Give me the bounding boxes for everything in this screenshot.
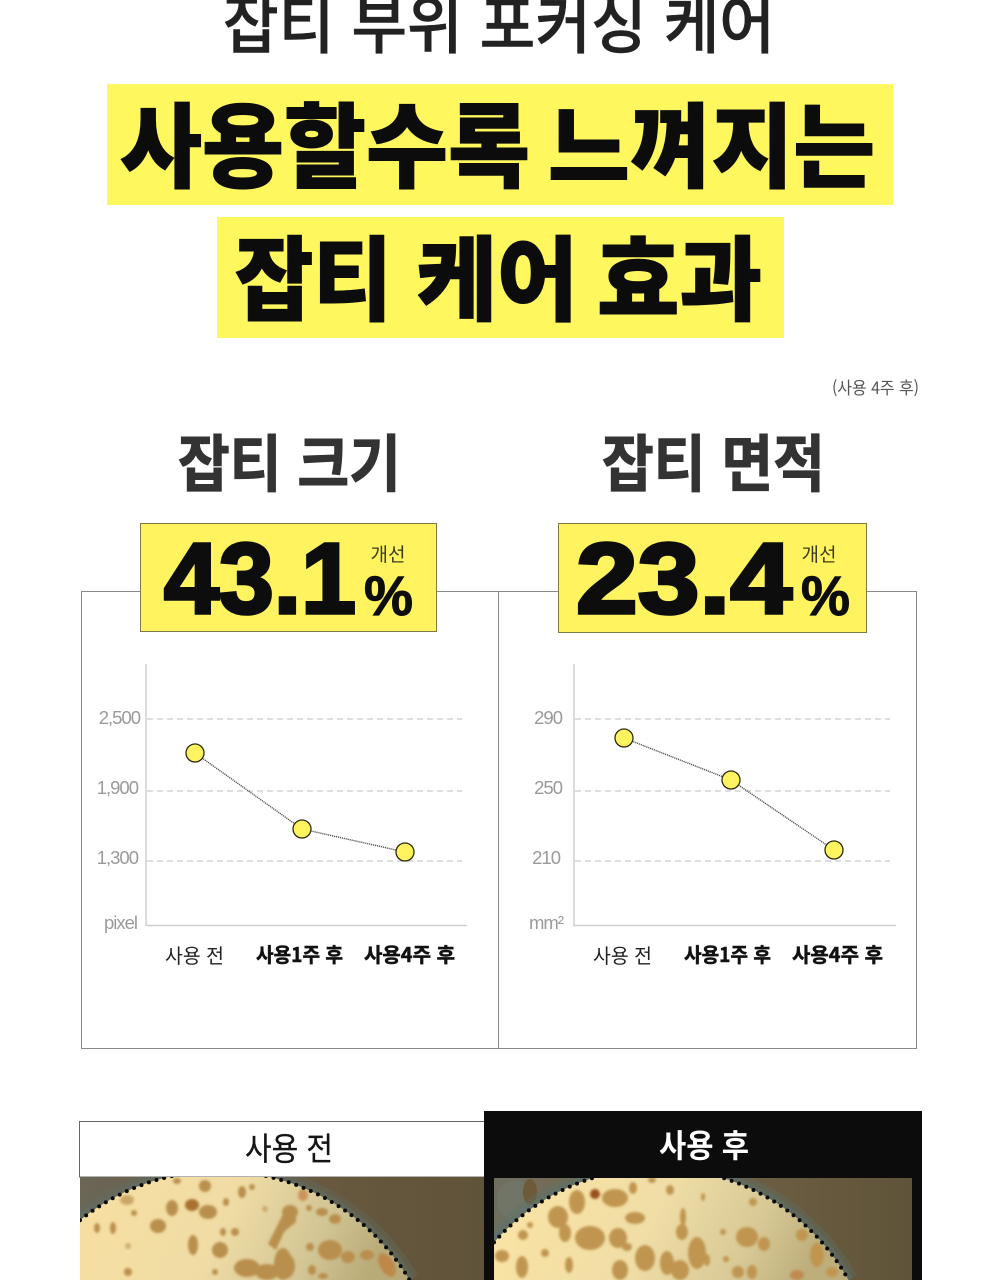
line chart: blemish area: 210	[532, 847, 561, 868]
panel: blemish area	[498, 414, 916, 1048]
after frame and header	[484, 1111, 922, 1280]
heading line 2 with highlight	[217, 207, 784, 340]
stat badge: 23.4%: %	[801, 564, 850, 627]
after photo	[494, 1168, 912, 1280]
line chart: blemish area: 250	[534, 777, 563, 798]
main heading	[107, 74, 893, 340]
line chart: blemish size: 1,300	[97, 847, 139, 868]
heading line 2 with highlight: 잡티	[235, 207, 392, 340]
line chart: blemish size: 2,500	[99, 707, 141, 728]
stat badge: 23.4%: 개선	[802, 540, 836, 567]
line chart: blemish size: 사용 전	[165, 940, 224, 969]
panel: before use	[80, 1122, 500, 1280]
heading line 1 with highlight	[107, 74, 893, 207]
panel frame left	[82, 592, 498, 1048]
before header: 사용 전	[245, 1124, 333, 1170]
heading line 1 with highlight: 느껴지는	[548, 74, 875, 207]
after frame and header: 사용 후	[659, 1121, 749, 1167]
heading line 1 with highlight: 사용할수록	[120, 74, 530, 207]
line chart: blemish area: 사용1주 후	[684, 939, 771, 968]
panel: blemish size	[82, 414, 498, 1048]
line chart: blemish size: 사용4주 후	[364, 939, 455, 968]
heading: blemish size: 잡티 크기	[178, 414, 401, 504]
stat badge: 43.1%: %	[364, 564, 413, 627]
before header	[80, 1122, 500, 1177]
footnote: after 4 weeks of use: (사용 4주 후)	[832, 374, 919, 399]
line chart: blemish area: 290	[534, 707, 563, 728]
line chart: blemish size: 1,900	[97, 777, 139, 798]
line chart: blemish size: 사용1주 후	[256, 939, 343, 968]
heading line 2 with highlight: 효과	[597, 207, 762, 340]
line chart: blemish size: pixel	[104, 912, 137, 933]
before photo	[80, 1171, 484, 1280]
panel frame right	[498, 592, 916, 1048]
stat badge: 43.1%: 개선	[371, 540, 405, 567]
line chart: blemish area: mm²	[529, 912, 564, 933]
stat badge: 23.4%: 23.4	[576, 523, 792, 635]
line chart: blemish size	[97, 664, 467, 969]
stat badge: 43.1%: 43.1	[164, 523, 356, 635]
line chart: blemish area	[529, 664, 896, 969]
stat badge: 43.1%	[140, 523, 436, 635]
panel: after use	[484, 1111, 922, 1280]
heading: blemish area: 잡티 면적	[602, 414, 825, 504]
line chart: blemish area: 사용4주 후	[792, 939, 883, 968]
stat badge: 23.4%	[558, 523, 866, 635]
heading line 2 with highlight: 케어	[416, 207, 578, 340]
line chart: blemish area: 사용 전	[593, 940, 652, 969]
